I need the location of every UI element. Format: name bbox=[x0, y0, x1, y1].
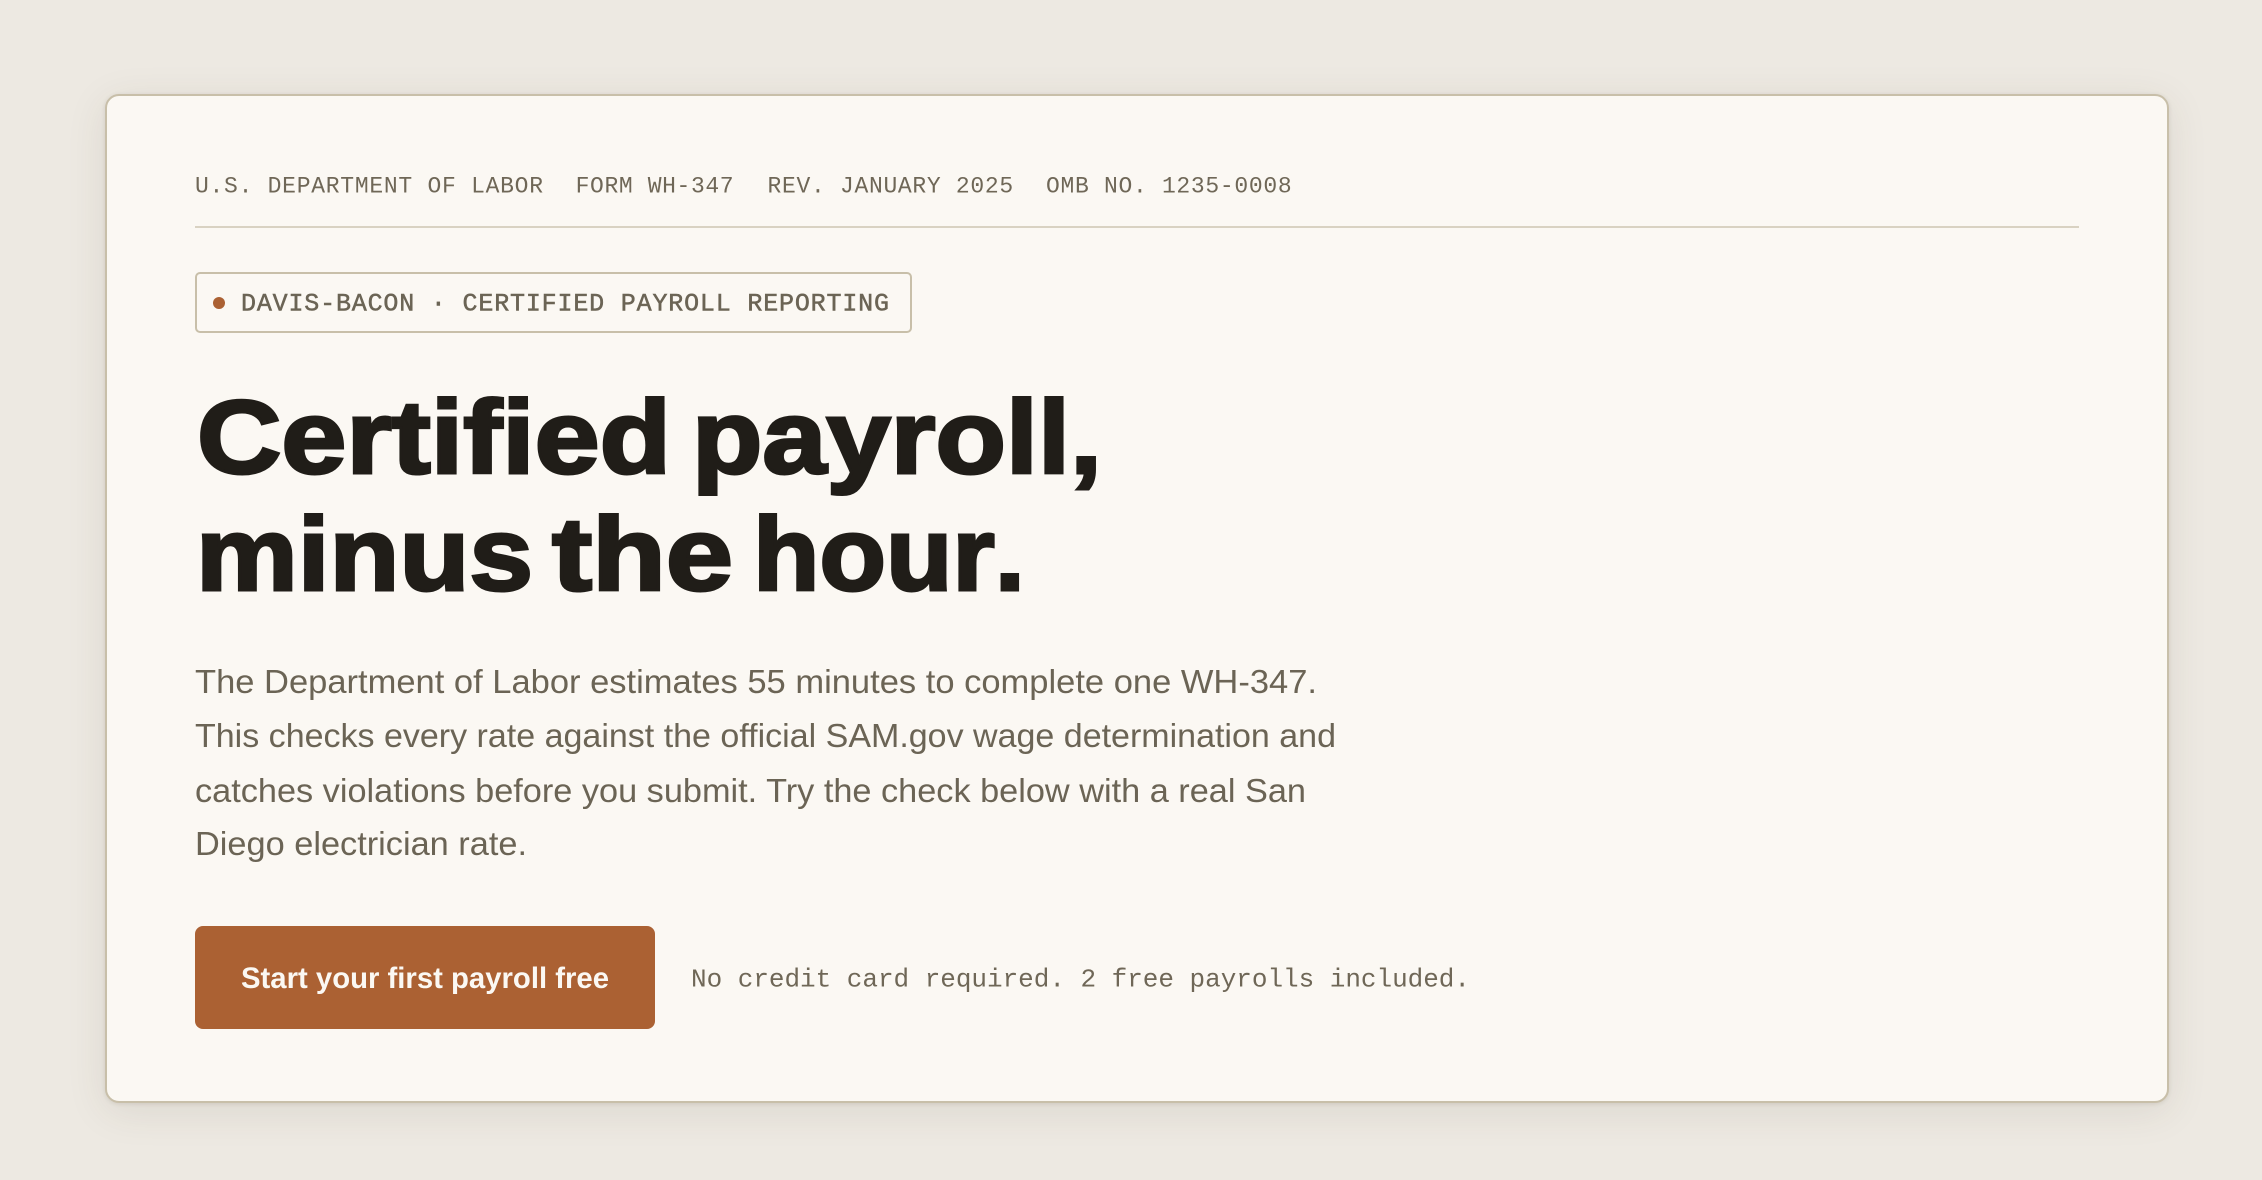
body paragraph: catches violations before you submit. Try the check below with a real San bbox=[195, 772, 1306, 809]
title: hour. bbox=[753, 497, 1025, 613]
badge label: DAVIS-BACON · CERTIFIED PAYROLL REPORTING bbox=[241, 290, 889, 318]
body paragraph: Diego electrician rate. bbox=[195, 825, 527, 862]
panel: form card bbox=[105, 94, 2169, 1103]
form header line bbox=[195, 174, 1292, 200]
body paragraph: The Department of Labor estimates 55 minutes to complete one WH-347. bbox=[195, 663, 1317, 700]
badge: Davis-Bacon bbox=[196, 273, 911, 332]
button: start payroll bbox=[195, 926, 655, 1029]
form header line: REV. JANUARY 2025 bbox=[768, 174, 1013, 200]
body paragraph: This checks every rate against the official SAM.gov wage determination and bbox=[195, 717, 1336, 754]
title: minus bbox=[196, 497, 533, 613]
icon: status dot bbox=[213, 297, 225, 309]
title: the bbox=[552, 497, 733, 613]
body paragraph bbox=[195, 663, 1336, 862]
title bbox=[196, 380, 1102, 613]
note: no credit card: No credit card required. 2 free payrolls included. bbox=[691, 964, 1470, 994]
button: start payroll: Start your first payroll free bbox=[241, 962, 609, 995]
form header line: OMB NO. 1235-0008 bbox=[1046, 174, 1292, 200]
title: payroll, bbox=[692, 380, 1102, 496]
form header line: U.S. DEPARTMENT OF LABOR bbox=[195, 174, 543, 200]
form header line: FORM WH-347 bbox=[576, 174, 734, 200]
title: Certified bbox=[197, 380, 671, 496]
